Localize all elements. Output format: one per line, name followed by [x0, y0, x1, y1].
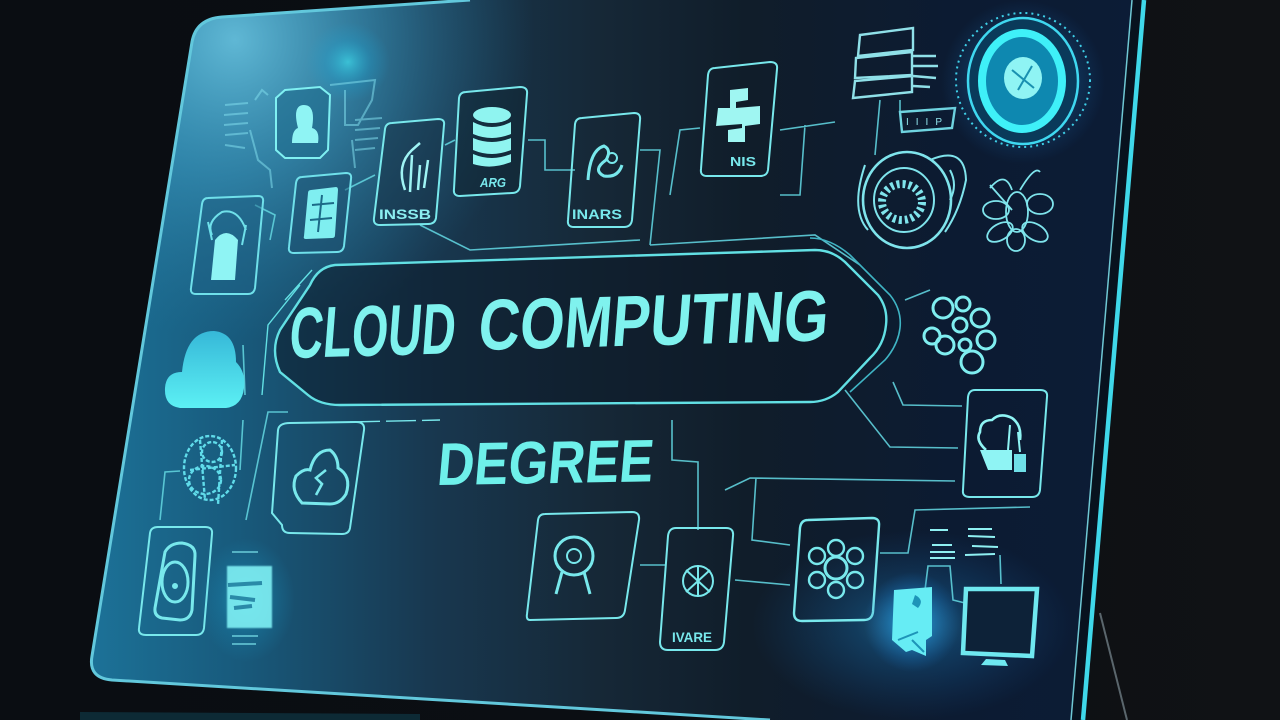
card: cloud with lock [963, 390, 1047, 497]
card: chart grid [289, 173, 351, 253]
card: python-like icon: NIS [730, 154, 756, 169]
card: outline cloud [272, 420, 440, 534]
icon: glowing disc [941, 0, 1105, 164]
card: tangled network with caption: INSSB [379, 206, 431, 222]
icon: monitor [963, 589, 1037, 666]
card: flower gear [794, 518, 879, 621]
central title frame [262, 238, 900, 405]
icon: server stack: IIIP [906, 117, 942, 128]
icon: molecule [924, 297, 995, 373]
card: swirl [568, 113, 640, 227]
icon: glowing data block [199, 538, 295, 662]
title: cloud computing: CLOUD [287, 289, 459, 374]
card: atom with caption [660, 528, 733, 650]
glow above person card [306, 22, 390, 102]
title: cloud computing: COMPUTING [476, 276, 832, 366]
card: database: ARG [479, 175, 506, 190]
reflection at panel base [80, 712, 420, 720]
data lines beside monitor [930, 529, 998, 558]
icon: glowing lock [864, 572, 960, 672]
icon: fuzzy emblem [184, 436, 236, 505]
icon: flower outline [983, 170, 1053, 251]
circuit connector lines [160, 100, 1030, 603]
card: python-like icon [701, 62, 777, 176]
card: tangled network with caption [374, 119, 444, 225]
card: database [454, 87, 527, 196]
subtitle: degree: DEGREE [435, 427, 657, 498]
icon: gear ring dial [858, 152, 966, 248]
card: padlock [191, 196, 263, 294]
card: person icon [276, 87, 330, 158]
icon: server stack [853, 28, 955, 132]
card: network robot [527, 512, 639, 620]
faded circuit art [224, 80, 382, 188]
card: atom with caption: IVARE [672, 629, 712, 645]
card: speaker/lens [139, 527, 212, 635]
icon: solid cloud [165, 331, 244, 408]
stand leg [1100, 613, 1127, 720]
title: cloud computing [287, 276, 832, 374]
card: swirl: INARS [572, 206, 622, 222]
